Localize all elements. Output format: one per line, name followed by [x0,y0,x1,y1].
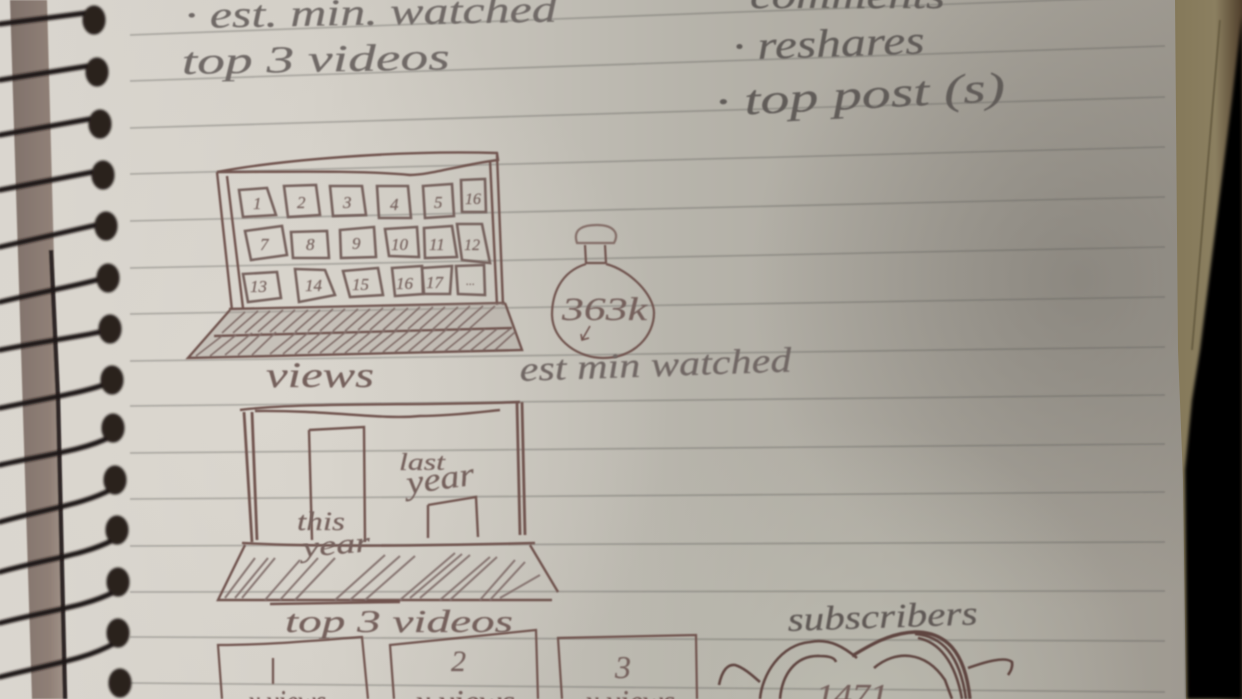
tile numbers: 4 [390,195,399,214]
handwritten list: left column: top 3 videos [181,36,450,83]
tile numbers: 3 [342,193,352,212]
label: est min watched: est min watched [519,341,793,389]
tile numbers: 16 [465,191,481,208]
video box 3 [558,635,697,699]
label: last year [399,450,477,502]
tile numbers: 14 [305,276,322,295]
label: subscribers: subscribers [787,595,978,639]
video box 3: 3 [614,649,631,685]
bar: last year [428,497,478,538]
right page edges and dark background [1175,0,1242,699]
tile numbers: 16 [396,274,414,293]
video tiles [239,179,490,302]
tile numbers: 1 [253,194,262,213]
heading: top 3 videos: top 3 videos [285,603,513,639]
tile numbers: ... [466,274,475,288]
label: last year: last [399,450,447,476]
tile numbers: 5 [434,193,442,212]
handwritten list: left column [181,0,558,83]
tile numbers: 2 [297,193,306,212]
tile numbers: 8 [306,235,315,254]
stopwatch icon with minutes watched: 363k [561,292,649,328]
notebook binding strip [10,0,66,699]
tile numbers: 9 [352,234,361,253]
label: last year: year [401,457,477,502]
tile numbers: 11 [429,235,445,254]
tile numbers: 17 [426,273,444,292]
video box 2 [390,630,538,699]
spiral binding coils [0,6,131,697]
laptop sketch: this year vs last year bars [218,402,558,604]
laptop sketch: views grid [188,152,522,358]
video box 1 [218,637,368,699]
tile numbers [250,191,481,296]
tile numbers: 7 [260,235,270,254]
handwritten list: right column: · top post (s) [714,65,1006,126]
tile numbers: 10 [391,235,408,254]
heart shape with subscriber count and arms [719,632,1012,699]
label: this year: this [297,507,345,536]
stopwatch icon with minutes watched [552,225,654,358]
label: this year [297,507,371,564]
handwritten list: right column: · reshares [732,17,925,69]
label: this year: year [297,527,371,564]
label: views: views [266,355,374,395]
tile numbers: 12 [464,237,480,254]
tile numbers: 15 [352,275,369,294]
video box 2: 2 [451,645,466,678]
bar: this year [309,427,365,542]
tile numbers: 13 [250,277,267,296]
handwritten list: right column [714,0,1006,126]
